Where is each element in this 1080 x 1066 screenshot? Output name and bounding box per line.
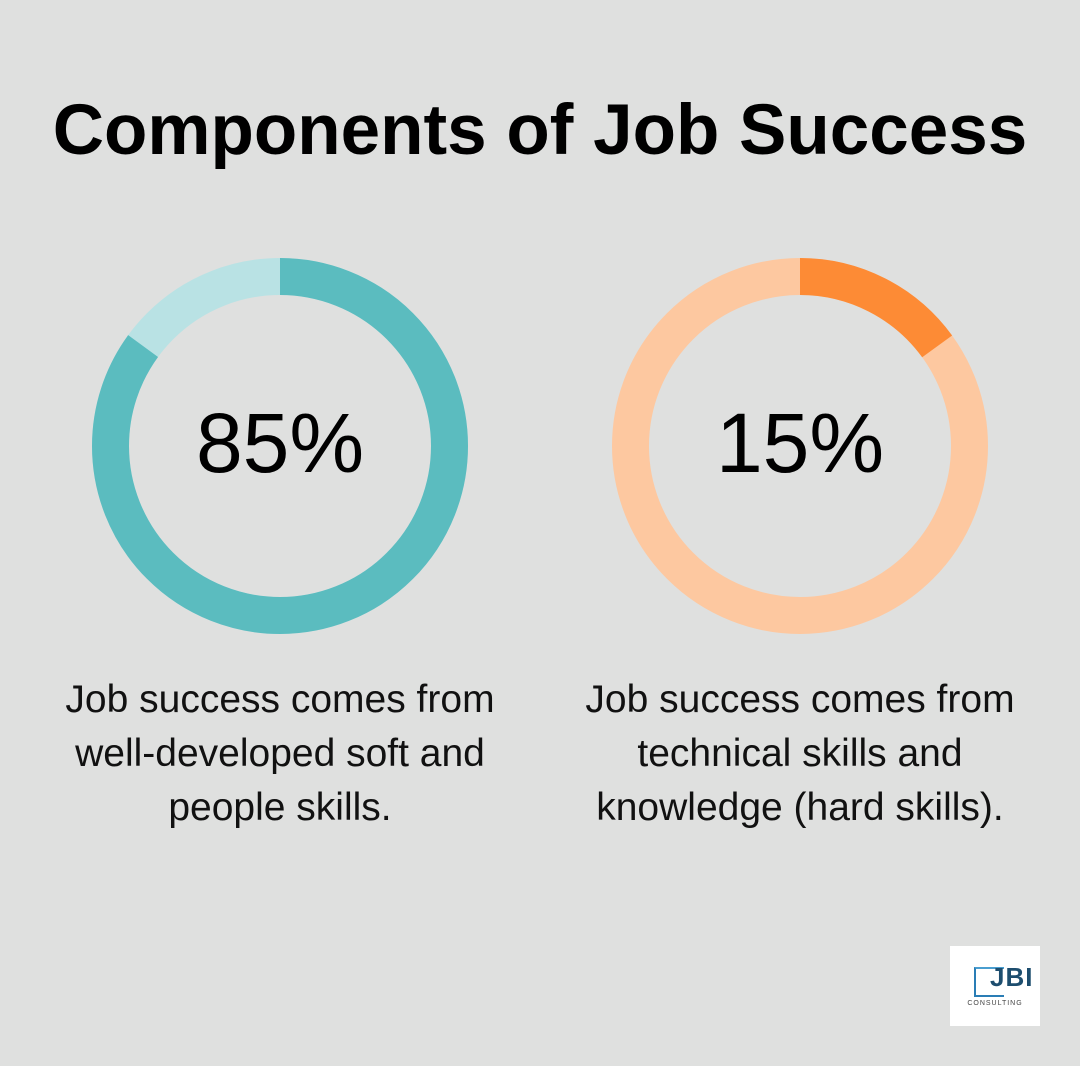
donut: 85% xyxy=(110,276,450,616)
caption: soft skills xyxy=(65,678,495,829)
logo xyxy=(950,946,1040,1026)
caption: hard skills: knowledge (hard skills). xyxy=(596,786,1004,829)
caption: soft skills: well-developed soft and xyxy=(75,732,485,775)
donut: 15%: 15% xyxy=(716,396,884,490)
caption: soft skills: people skills. xyxy=(168,786,392,829)
caption: soft skills: Job success comes from xyxy=(65,678,495,721)
caption: hard skills: technical skills and xyxy=(637,732,963,775)
logo: JBI xyxy=(990,962,1033,992)
donut: 15% xyxy=(630,276,970,616)
logo: CONSULTING xyxy=(967,1000,1023,1007)
donut charts xyxy=(92,258,988,634)
caption: hard skills: Job success comes from xyxy=(585,678,1015,721)
caption: hard skills xyxy=(585,678,1015,829)
title: Components of Job Success xyxy=(53,91,1027,170)
donut: 85%: 85% xyxy=(196,396,364,490)
